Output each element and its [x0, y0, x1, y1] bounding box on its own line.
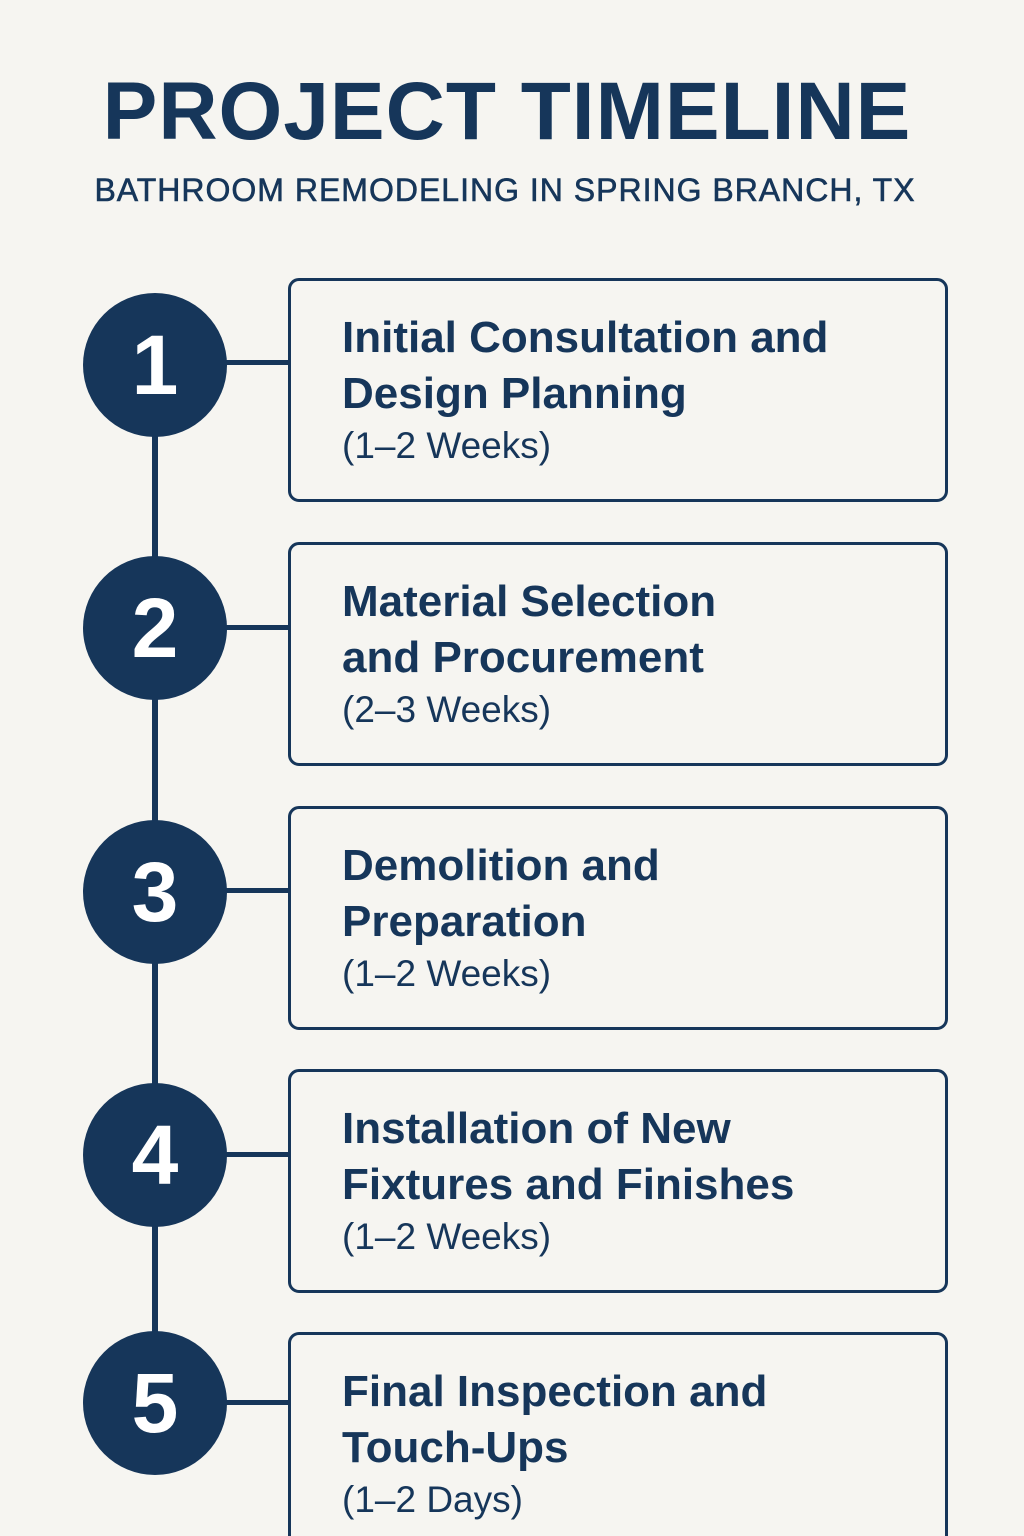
panel: step 1: [288, 278, 948, 502]
panel: step 4: Fixtures and Finishes: [342, 1160, 794, 1209]
panel: step 1: Design Planning: [342, 369, 687, 418]
panel: step 3: Demolition and: [342, 841, 660, 890]
step 3 connector: [225, 888, 290, 893]
panel: step 2: (2–3 Weeks): [342, 689, 551, 730]
panel: step 3: Preparation: [342, 897, 587, 946]
step 2 circle: [83, 556, 227, 700]
panel: step 3: (1–2 Weeks): [342, 953, 551, 994]
step 4 connector: [225, 1152, 290, 1157]
panel: step 5: (1–2 Days): [342, 1479, 523, 1520]
panel: step 2: [288, 542, 948, 766]
panel: step 4: [288, 1069, 948, 1293]
title: PROJECT TIMELINE: [103, 66, 911, 157]
timeline line: [152, 365, 158, 1405]
panel: step 5: [288, 1332, 948, 1536]
step 4 circle: 4: [132, 1108, 178, 1202]
panel: step 5: Touch-Ups: [342, 1423, 568, 1472]
step 5 circle: 5: [132, 1356, 178, 1450]
panel: step 1: (1–2 Weeks): [342, 425, 551, 466]
panel: step 3: [288, 806, 948, 1030]
panel: step 4: Installation of New: [342, 1104, 731, 1153]
step 2 connector: [225, 625, 290, 630]
step 3 circle: [83, 820, 227, 964]
step 5 connector: [225, 1400, 290, 1405]
panel: step 2: and Procurement: [342, 633, 704, 682]
step 5 circle: [83, 1331, 227, 1475]
panel: step 5: Final Inspection and: [342, 1367, 767, 1416]
step 3 circle: 3: [132, 845, 178, 939]
step 1 connector: [225, 360, 290, 365]
step 2 circle: 2: [132, 581, 178, 675]
step 4 circle: [83, 1083, 227, 1227]
subtitle: BATHROOM REMODELING IN SPRING BRANCH, TX: [94, 172, 916, 208]
panel: step 1: Initial Consultation and: [342, 313, 828, 362]
panel: step 2: Material Selection: [342, 577, 716, 626]
panel: step 4: (1–2 Weeks): [342, 1216, 551, 1257]
step 1 circle: [83, 293, 227, 437]
step 1 circle: 1: [132, 318, 178, 412]
